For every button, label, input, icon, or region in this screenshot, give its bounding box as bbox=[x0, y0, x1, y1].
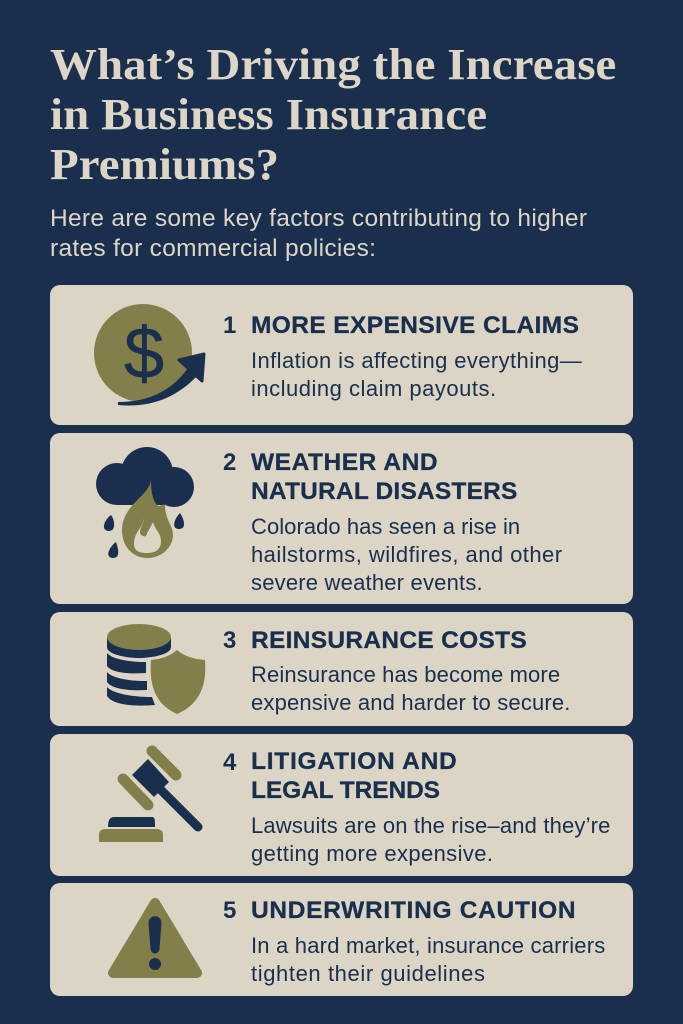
text 4: getting more expensive. bbox=[251, 841, 493, 866]
text 1: including claim payouts. bbox=[251, 376, 497, 401]
number 5: 5 bbox=[223, 897, 236, 924]
heading 5: UNDERWRITING CAUTION bbox=[251, 897, 576, 924]
number 3: 3 bbox=[223, 627, 236, 654]
heading 2: WEATHER AND bbox=[251, 449, 438, 476]
icon: dollar coin with rising arrow: $ bbox=[124, 314, 164, 394]
text 2: Colorado has seen a rise in bbox=[251, 514, 520, 538]
heading 4: LEGAL TRENDS bbox=[251, 777, 440, 804]
panel: litigation and legal trends bbox=[50, 734, 633, 876]
heading 1: MORE EXPENSIVE CLAIMS bbox=[251, 312, 579, 339]
panel: reinsurance costs bbox=[50, 612, 633, 726]
text 3 bbox=[251, 662, 571, 715]
subtitle: Here are some key factors contributing to higher bbox=[50, 205, 587, 232]
title: What’s Driving the Increase bbox=[50, 40, 616, 89]
heading 2: NATURAL DISASTERS bbox=[251, 478, 518, 505]
panel: weather and natural disasters bbox=[50, 433, 633, 604]
number 1: 1 bbox=[223, 312, 236, 339]
text 5: In a hard market, insurance carriers bbox=[251, 933, 605, 958]
text 3: Reinsurance has become more bbox=[251, 662, 560, 687]
text 4 bbox=[251, 813, 611, 866]
text 2 bbox=[251, 514, 563, 595]
number 2: 2 bbox=[223, 449, 236, 476]
text 5: tighten their guidelines bbox=[251, 961, 486, 986]
text 2: severe weather events. bbox=[251, 570, 483, 595]
text 3: expensive and harder to secure. bbox=[251, 690, 571, 715]
subtitle bbox=[50, 205, 587, 262]
panel: underwriting caution bbox=[50, 883, 633, 996]
text 5 bbox=[251, 933, 605, 986]
subtitle: rates for commercial policies: bbox=[50, 235, 376, 262]
title: in Business Insurance bbox=[50, 90, 487, 139]
title: Premiums? bbox=[50, 140, 279, 189]
text 4: Lawsuits are on the rise–and they’re bbox=[251, 813, 611, 838]
heading 3: REINSURANCE COSTS bbox=[251, 627, 527, 654]
title bbox=[50, 40, 616, 189]
heading 2 bbox=[250, 449, 518, 505]
text 1 bbox=[251, 348, 582, 401]
heading 4 bbox=[251, 748, 457, 804]
text 1: Inflation is affecting everything— bbox=[251, 348, 582, 373]
text 2: hailstorms, wildfires, and other bbox=[251, 542, 563, 567]
number 4: 4 bbox=[223, 749, 236, 776]
panel: more expensive claims bbox=[50, 285, 633, 425]
heading 4: LITIGATION AND bbox=[251, 748, 457, 775]
